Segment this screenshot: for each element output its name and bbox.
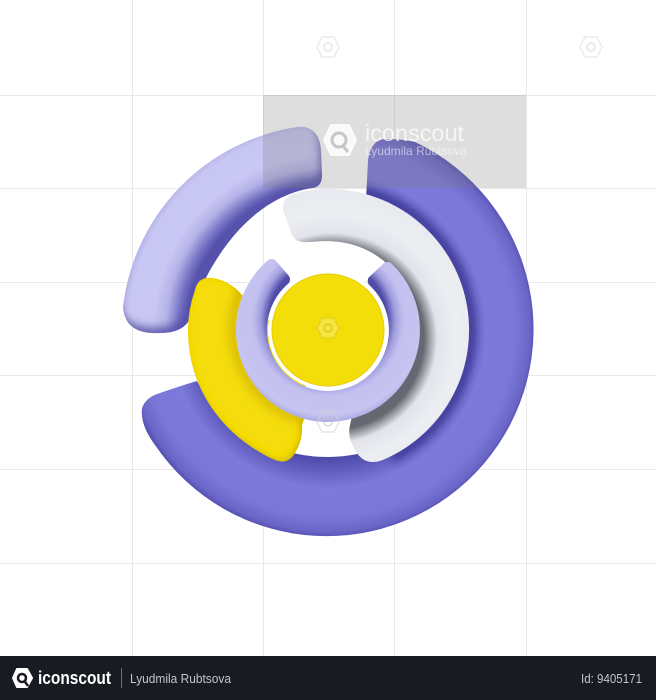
donut chart illustration [123,127,534,536]
segment: white arc [283,189,469,462]
icon: hexagon logo [324,125,356,155]
watermark icon: on yellow circle [317,318,339,338]
watermark icon: lower center [317,412,339,432]
segment: small lilac ring [242,265,414,416]
footer bar [0,656,656,700]
watermark: large logo [324,120,467,158]
footer logo icon [13,669,32,687]
segment: large purple arc [142,139,534,536]
shadow: white arc cast on purple arc [366,184,480,464]
watermark band [263,95,526,188]
footer brand: iconscout [38,668,111,688]
center yellow circle [272,274,384,386]
footer divider [121,668,122,688]
segment: yellow arc [188,278,310,461]
shadow: lilac ring on yellow arc [226,288,304,426]
footer id: Id: 9405171 [581,671,642,686]
segment: light lavender arc [123,127,322,333]
watermark icon: top right [580,37,602,57]
watermark author text: Lyudmila Rubtsova [365,144,467,158]
watermark brand text: iconscout [365,120,465,146]
watermark icon: top center [317,37,339,57]
footer author: Lyudmila Rubtsova [130,671,232,686]
center halo [268,270,388,390]
